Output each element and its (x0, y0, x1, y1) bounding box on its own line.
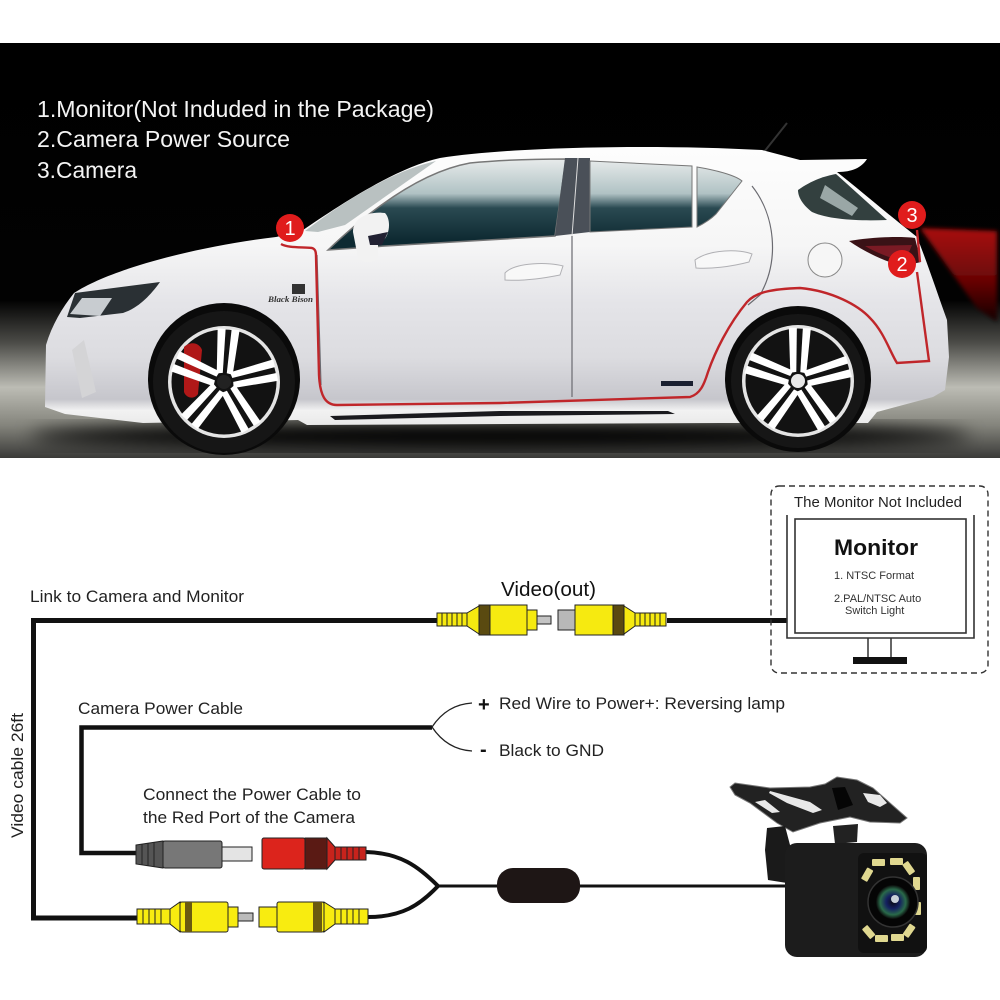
RCA plug: camera video left (137, 902, 253, 932)
label: ground wire: - (480, 739, 487, 761)
monitor box (771, 486, 988, 673)
parts list: 3.Camera (37, 157, 137, 183)
camera red beam (920, 228, 997, 322)
label: video cable length: Video cable 26ft (8, 713, 27, 838)
inline filter box (497, 868, 580, 903)
rear quarter window (697, 167, 742, 227)
side sill stripe (330, 411, 675, 420)
Video(out) label: Video(out) (501, 579, 596, 601)
RCA plug: video right yellow (558, 605, 666, 635)
power cable fork (432, 703, 472, 751)
label: connection note: Connect the Power Cable to (143, 785, 361, 804)
door seams (317, 186, 772, 397)
LED ring (861, 858, 921, 942)
power port: red (262, 838, 366, 869)
marker 3: 3 (906, 205, 918, 227)
monitor cable (667, 618, 787, 623)
tail light (849, 237, 921, 266)
camera housing (785, 843, 927, 957)
power cable (82, 728, 432, 853)
front wheel (148, 303, 300, 455)
marker 1 (276, 214, 304, 242)
monitor box: 1. NTSC Format (834, 570, 914, 582)
antenna (764, 123, 787, 152)
emblem front: Black Bison (267, 294, 313, 304)
parts list: 2.Camera Power Source (37, 126, 290, 152)
red wiring route on car (281, 230, 929, 405)
power plug: grey (136, 841, 252, 868)
rear window (798, 174, 887, 220)
lens (868, 877, 918, 927)
wiring diagram panel (8, 486, 988, 957)
door handle front (505, 264, 563, 280)
camera (730, 777, 927, 957)
camera split cable (366, 852, 438, 917)
parts list (37, 96, 434, 183)
front door window (328, 159, 566, 250)
rear door window (590, 161, 692, 232)
monitor box: The Monitor Not Included (794, 494, 962, 511)
mirror (353, 213, 389, 262)
windshield (305, 161, 436, 232)
label: connection note (143, 785, 361, 827)
monitor screen (787, 515, 974, 664)
front bumper vents (72, 340, 96, 398)
fuel flap (808, 243, 842, 277)
label: connection note: the Red Port of the Camera (143, 808, 356, 827)
emblem rear (661, 381, 693, 386)
emblem front (267, 284, 313, 304)
marker 1: 1 (284, 218, 296, 240)
marker 2: 2 (896, 254, 908, 276)
parts list: 1.Monitor(Not Induded in the Package) (37, 96, 434, 122)
mount arm and joints (765, 826, 790, 883)
label: ground wire: Black to GND (499, 741, 604, 760)
monitor box: Monitor (834, 535, 918, 560)
rear wheel (725, 306, 871, 452)
car body (45, 147, 949, 425)
RCA socket: camera video right (259, 902, 368, 932)
photo panel: car wiring route (0, 43, 1000, 458)
B pillar (555, 158, 590, 236)
monitor box: Switch Light (845, 605, 904, 617)
RCA plug: video left yellow (437, 605, 551, 635)
car illustration (45, 147, 949, 455)
marker 2 (888, 250, 916, 278)
video cable (34, 620, 437, 918)
label: positive wire: + (478, 694, 490, 716)
monitor box: 2.PAL/NTSC Auto (834, 593, 921, 605)
headlight (67, 282, 160, 318)
label: positive wire: Red Wire to Power+: Reversing lamp (499, 694, 785, 713)
marker 3 (898, 201, 926, 229)
label: power cable: Camera Power Cable (78, 699, 243, 718)
label: link cable: Link to Camera and Monitor (30, 587, 244, 606)
camera trunk cable (438, 884, 790, 888)
door handle rear (695, 251, 752, 268)
mounting bracket (730, 777, 907, 832)
